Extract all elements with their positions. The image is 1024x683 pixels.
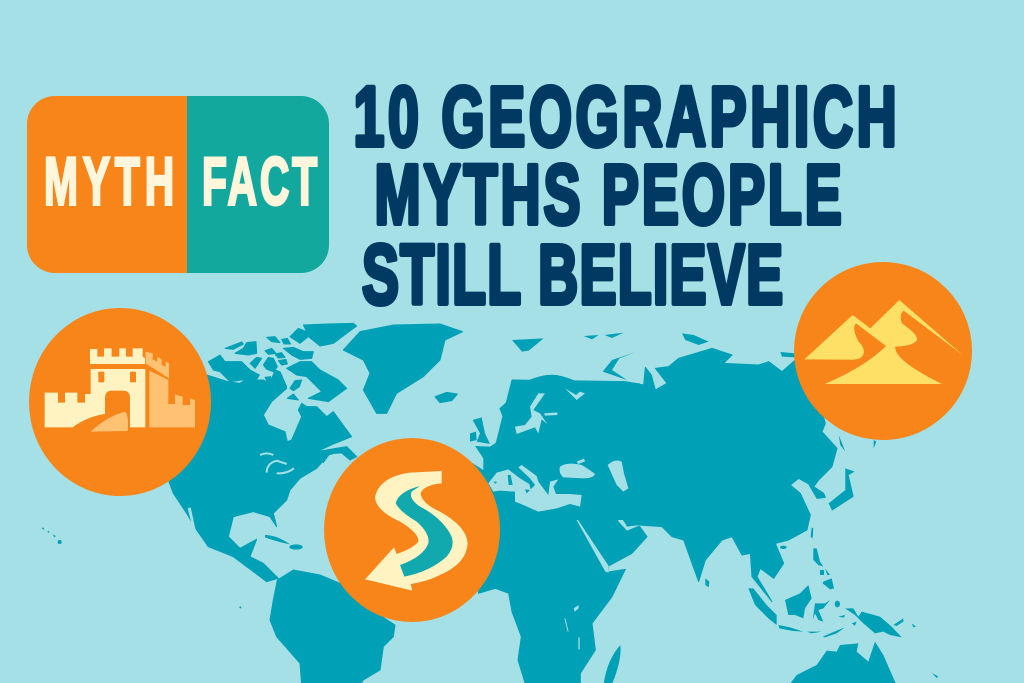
landmass: South America xyxy=(270,570,395,683)
title: 10 GEOGRAPHICH xyxy=(354,71,897,164)
icon: mountains circle xyxy=(794,262,972,440)
landmass: North America xyxy=(42,370,360,612)
panel: fact side xyxy=(187,96,329,273)
icon: great wall circle xyxy=(29,308,211,496)
title: MYTHS PEOPLE xyxy=(374,149,842,242)
title xyxy=(354,71,897,322)
badge: myth / fact xyxy=(27,96,329,273)
panel: myth side xyxy=(27,96,187,273)
title: STILL BELIEVE xyxy=(362,229,783,322)
landmass: Southeast Asia and Australia xyxy=(748,527,938,683)
label: myth: MYTH xyxy=(44,143,174,219)
landmass: Canadian Arctic islands xyxy=(208,323,357,402)
icon: river circle xyxy=(324,438,500,622)
landmass: Greenland and Iceland xyxy=(343,324,463,413)
world map xyxy=(42,323,938,683)
label: fact: FACT xyxy=(202,143,317,219)
landmass: Asia and Africa xyxy=(462,333,876,683)
landmass: Europe xyxy=(470,375,640,520)
